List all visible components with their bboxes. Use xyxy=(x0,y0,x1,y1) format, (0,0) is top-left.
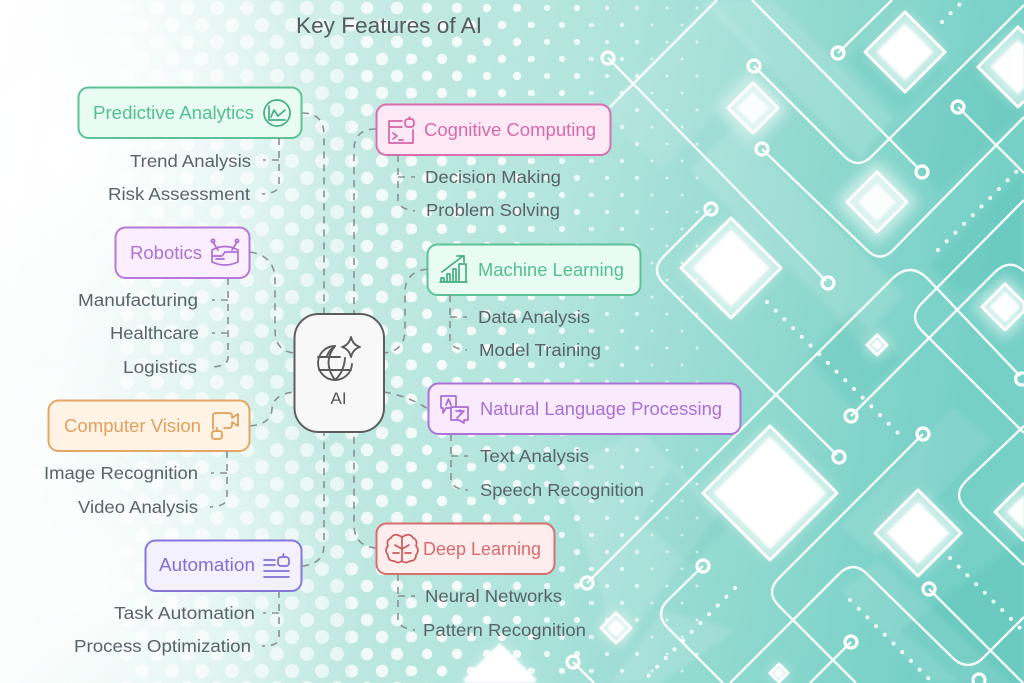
panel: Cognitive Computing xyxy=(376,104,610,220)
panel: Predictive Analytics: Predictive Analytics xyxy=(93,103,254,123)
panel: Computer Vision xyxy=(44,400,250,517)
sub-items: Computer Vision: Image Recognition xyxy=(44,463,198,483)
panel: Computer Vision: Computer Vision xyxy=(64,416,201,436)
panel: Natural Language Processing: Natural Language Processing xyxy=(480,399,722,419)
circuit end nodes xyxy=(567,47,1024,683)
sub-items: Natural Language Processing xyxy=(451,434,644,500)
sub-items: Computer Vision: Video Analysis xyxy=(78,497,198,517)
sub-items: Predictive Analytics xyxy=(108,138,279,204)
sub-items: Cognitive Computing: Decision Making xyxy=(425,167,561,187)
diamond outlines xyxy=(601,12,1024,682)
icon: terminal with robot xyxy=(389,117,414,143)
glow halos xyxy=(465,14,1024,683)
sub-items: Natural Language Processing: Speech Recognition xyxy=(480,480,644,500)
central AI hub: AI xyxy=(330,389,347,408)
central AI hub xyxy=(294,314,384,432)
sub-items: Natural Language Processing: Text Analysis xyxy=(480,446,589,466)
panel: Predictive Analytics xyxy=(78,88,302,204)
sub-items: Deep Learning: Neural Networks xyxy=(425,586,562,606)
sub-items: Machine Learning xyxy=(450,295,601,360)
icon: robot xyxy=(211,239,239,265)
panel: Deep Learning xyxy=(376,524,586,640)
icon: translate speech bubbles xyxy=(441,396,468,423)
halftone dot field xyxy=(0,0,710,683)
glowing diamonds xyxy=(463,12,1024,683)
diagonal tonal bands xyxy=(560,0,1024,683)
title: Key Features of AI xyxy=(296,13,482,38)
sub-items: Machine Learning: Data Analysis xyxy=(478,307,590,327)
icon: line chart in circle xyxy=(264,100,290,126)
sub-items: Deep Learning: Pattern Recognition xyxy=(423,620,586,640)
sub-items: Predictive Analytics: Risk Assessment xyxy=(108,184,250,204)
panel: Deep Learning: Deep Learning xyxy=(423,539,541,559)
sub-items: Predictive Analytics: Trend Analysis xyxy=(130,151,251,171)
sub-items: Robotics: Logistics xyxy=(123,357,197,377)
icon: camera with robot xyxy=(212,413,238,439)
circuit lines xyxy=(573,0,1024,683)
icon: brain xyxy=(386,535,418,562)
sub-items: Cognitive Computing xyxy=(398,155,561,220)
panel: Machine Learning xyxy=(428,244,640,360)
sub-items: Robotics: Healthcare xyxy=(110,323,199,343)
sub-items: Cognitive Computing: Problem Solving xyxy=(426,200,560,220)
panel: Automation xyxy=(74,540,302,656)
connectors from AI hub to category boxes xyxy=(250,113,428,566)
sub-items: Computer Vision xyxy=(44,451,227,517)
panel: Natural Language Processing xyxy=(428,384,740,500)
sub-items: Robotics: Manufacturing xyxy=(78,290,198,310)
panel: Robotics xyxy=(78,228,250,377)
panel: Automation: Automation xyxy=(159,555,255,575)
icon: globe with sparkle xyxy=(318,337,360,380)
panel: Machine Learning: Machine Learning xyxy=(478,260,624,280)
sub-items: Machine Learning: Model Training xyxy=(479,340,601,360)
panel: Robotics: Robotics xyxy=(130,243,202,263)
sub-items: Automation: Task Automation xyxy=(114,603,255,623)
panel: Cognitive Computing: Cognitive Computing xyxy=(424,120,596,140)
icon: list with robot xyxy=(264,554,289,577)
sub-items: Automation: Process Optimization xyxy=(74,636,251,656)
sub-items: Automation xyxy=(74,591,279,656)
circuit dotted traces xyxy=(647,0,1024,682)
sub-items: Deep Learning xyxy=(398,574,586,640)
icon: bars with rising arrow xyxy=(440,256,467,282)
diamond white cores xyxy=(463,24,1024,683)
sub-items: Robotics xyxy=(78,278,228,377)
